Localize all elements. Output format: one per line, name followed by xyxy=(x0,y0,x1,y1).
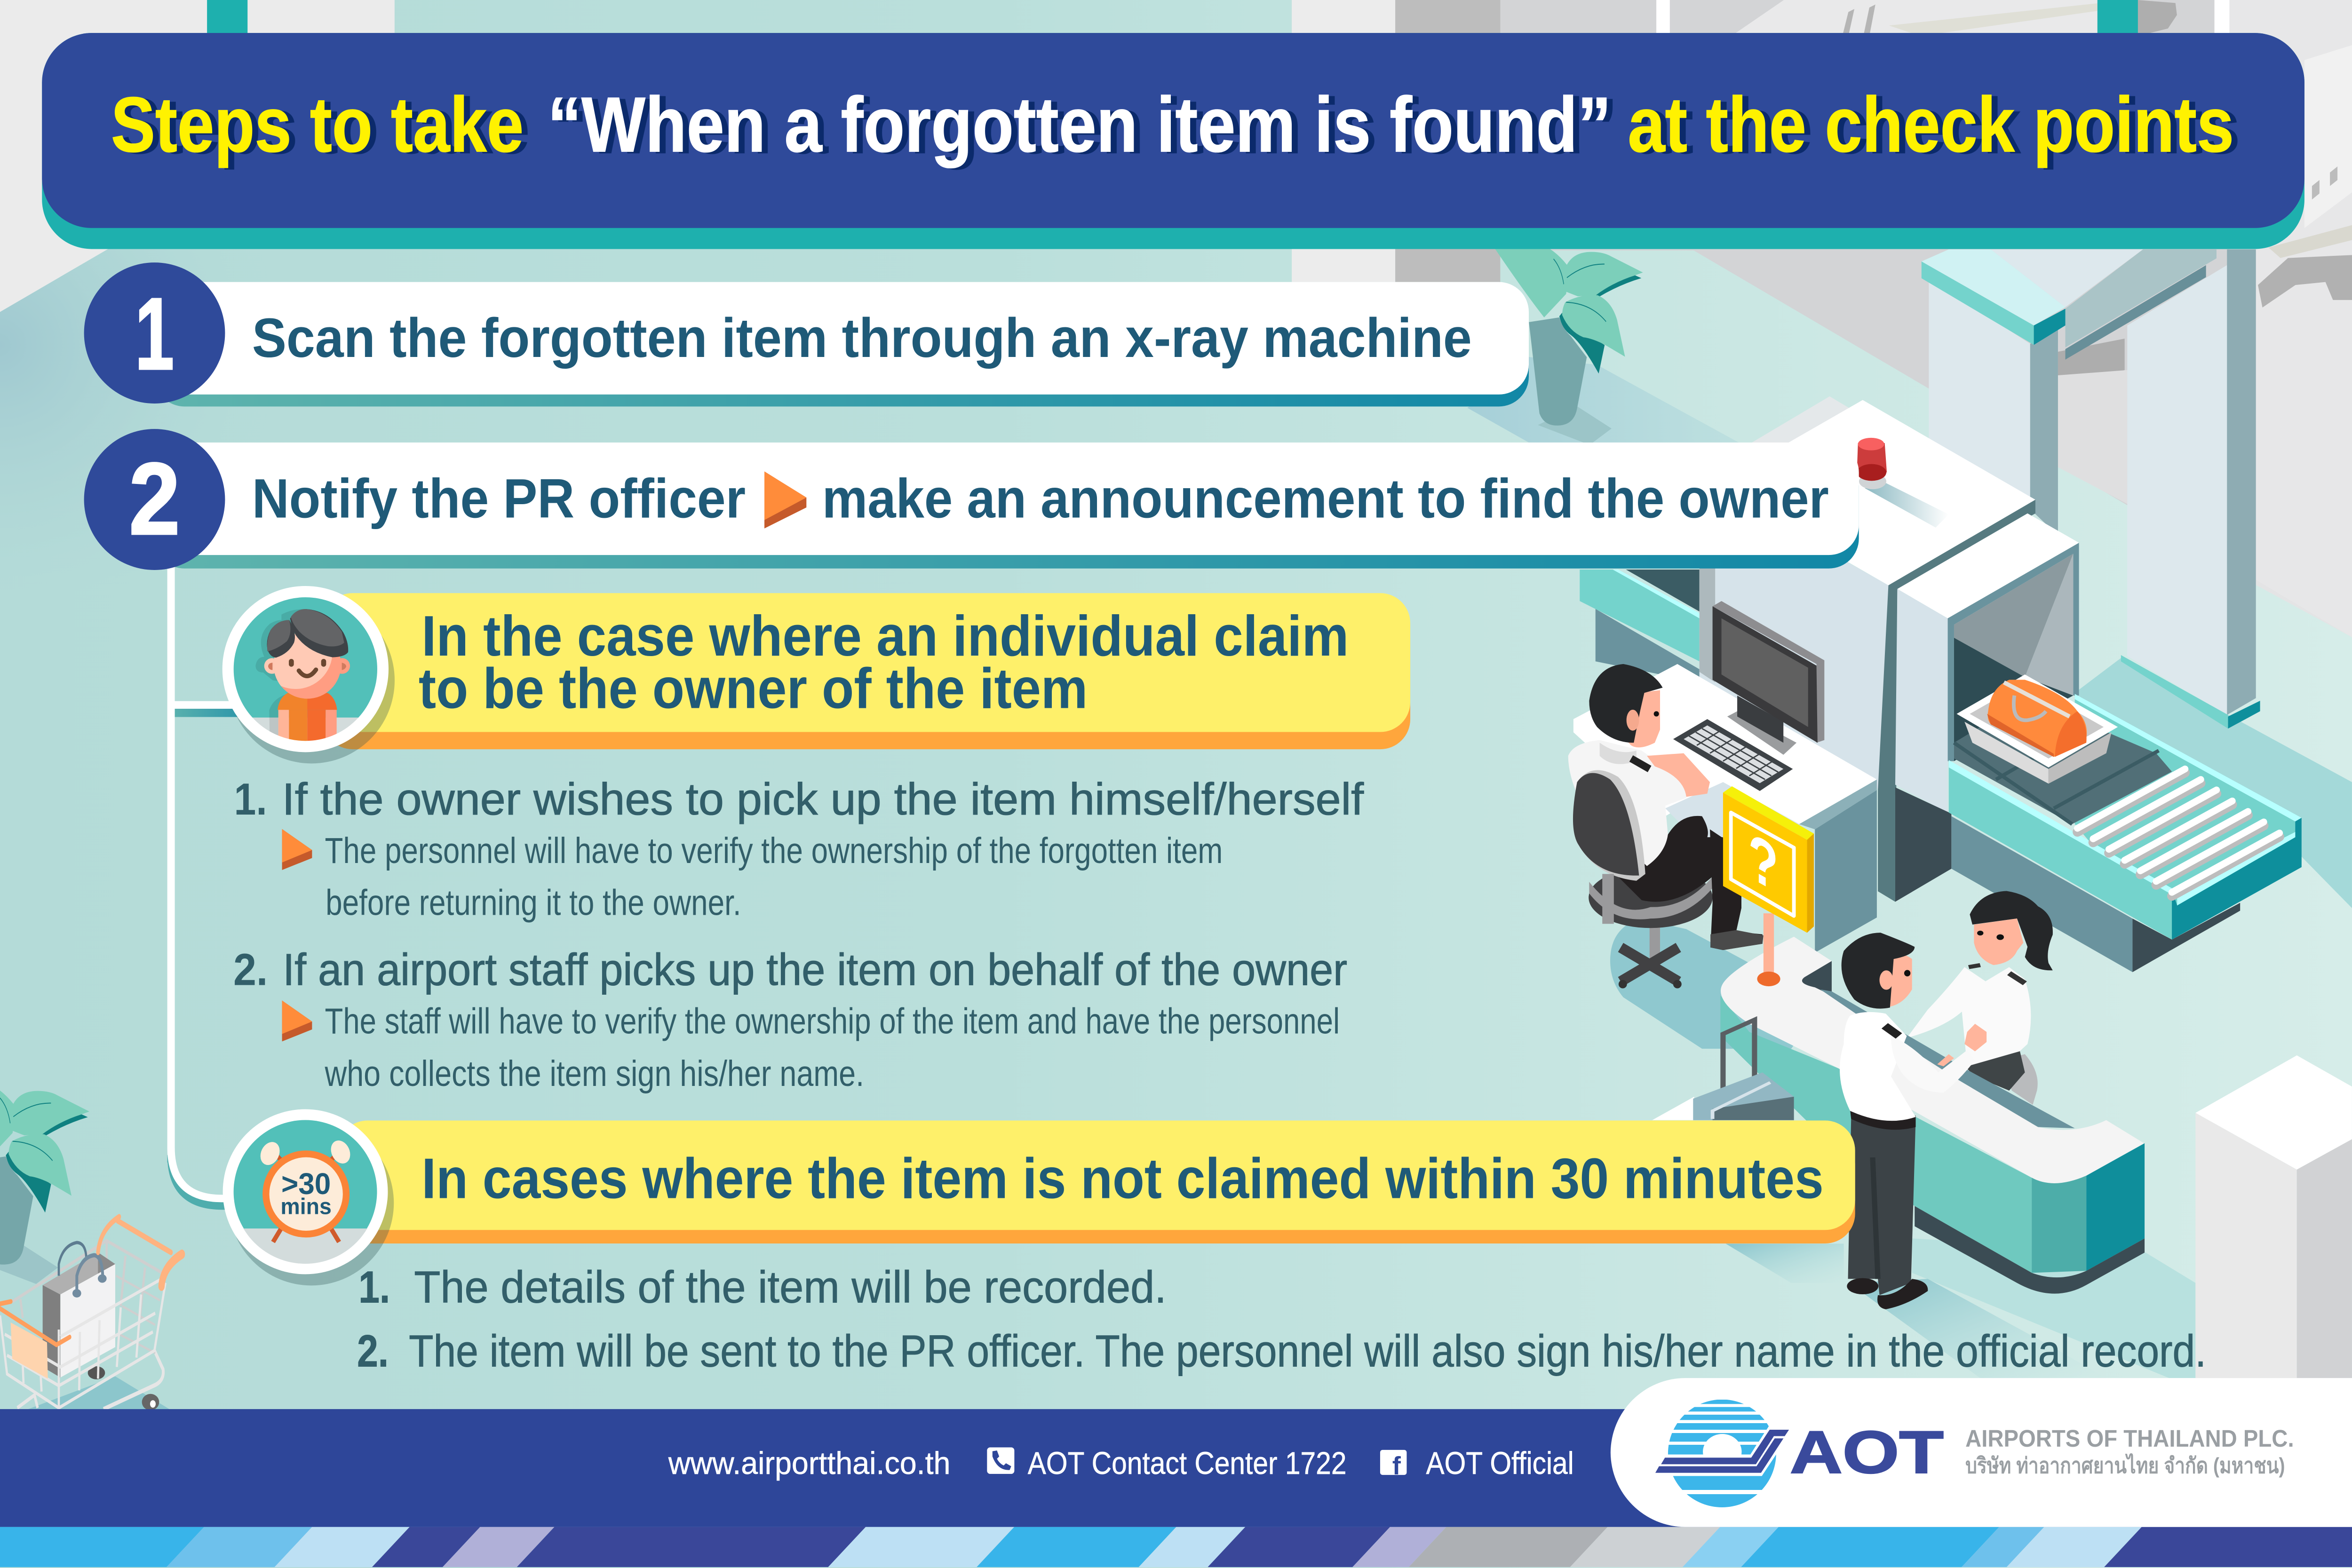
case 2 list xyxy=(357,1262,2206,1377)
icon: alarm clock: mins xyxy=(280,1195,332,1220)
orange bag in tray xyxy=(1957,674,2118,784)
case 2 heading: In cases where the item is not claimed within 30 minutes xyxy=(421,1146,1824,1210)
step 1 pill xyxy=(84,262,1529,406)
icon: person circle xyxy=(222,586,395,763)
icon: alarm clock: >30 xyxy=(281,1167,331,1201)
shopping cart xyxy=(0,1217,182,1410)
plant behind step 1 xyxy=(1491,238,1643,445)
case 1 list: before returning it to the owner. xyxy=(326,883,741,923)
case 1 list: The personnel will have to verify the ownership of the forgotten item xyxy=(325,831,1223,871)
AOT globe logo xyxy=(1655,1400,1789,1507)
step 2 number badge xyxy=(84,429,225,570)
title: Steps to take xyxy=(111,81,524,168)
conveyor belt xyxy=(1949,694,2302,972)
front desk counter xyxy=(1720,937,2145,1294)
icon: orange arrow xyxy=(764,471,806,529)
case 2 list: 1. xyxy=(358,1262,390,1313)
front counter scene xyxy=(1652,891,2195,1378)
monitor xyxy=(1713,601,1824,755)
company name xyxy=(1965,1425,2294,1478)
question-mark sign: ? xyxy=(1748,817,1778,908)
footer band xyxy=(0,1409,2352,1527)
footer stripes xyxy=(0,1527,2352,1567)
icon: facebook xyxy=(1380,1450,1406,1480)
case 1 list: If an airport staff picks up the item on behalf of the owner xyxy=(283,944,1347,995)
case 2 list: The details of the item will be recorded. xyxy=(414,1262,1167,1313)
step 2 text part two: make an announcement to find the owner xyxy=(822,467,1829,530)
step 2 text part one: Notify the PR officer xyxy=(252,467,746,530)
title: “When a forgotten item is found” xyxy=(548,81,1611,168)
case 1 list: 2. xyxy=(233,944,268,995)
step 2 number badge: 2 xyxy=(129,442,180,555)
floor bands xyxy=(1912,1238,2195,1378)
footer contact text: www.airportthai.co.th xyxy=(668,1446,950,1481)
icon: facebook: f xyxy=(1392,1452,1401,1480)
icon: alarm clock xyxy=(223,1109,394,1285)
step 1 number badge: 1 xyxy=(135,277,174,391)
red beacon xyxy=(1857,438,1887,489)
company name: AIRPORTS OF THAILAND PLC. xyxy=(1965,1425,2294,1452)
header banner xyxy=(42,33,2304,249)
walk-through arch xyxy=(1922,249,2260,729)
scanner back conveyor xyxy=(1580,570,1700,682)
footer contact text xyxy=(668,1446,1574,1481)
connector lines xyxy=(171,562,247,1206)
logo panel xyxy=(1611,1378,2352,1527)
step 1 number badge xyxy=(84,262,225,404)
icon: arrow bullet 2 xyxy=(282,1000,312,1041)
white block bottom right xyxy=(2195,1055,2352,1378)
case 2 yellow banner xyxy=(338,1120,1855,1243)
airport staff at counter xyxy=(1840,933,1986,1309)
case 1 heading: to be the owner of the item xyxy=(419,656,1088,720)
case 2 list: 2. xyxy=(357,1326,389,1377)
footer contact text: AOT Official xyxy=(1426,1446,1574,1481)
icon: arrow bullet xyxy=(282,829,312,870)
case 1 list: If the owner wishes to pick up the item himself/herself xyxy=(282,774,1364,824)
case 1 list xyxy=(233,774,1364,1094)
title: at the check points xyxy=(1628,81,2234,168)
case 1 yellow banner xyxy=(323,593,1410,749)
case 1 list: who collects the item sign his/her name. xyxy=(325,1054,864,1094)
case 1 list: 1. xyxy=(234,774,267,824)
case 1 heading xyxy=(419,604,1349,720)
keyboard xyxy=(1673,719,1793,791)
AOT wordmark: AOT xyxy=(1790,1419,1944,1486)
seated officer xyxy=(1568,664,1823,1049)
icon: phone xyxy=(987,1448,1014,1474)
title xyxy=(111,81,2234,168)
company name: บริษัท ท่าอากาศยานไทย จำกัด (มหาชน) xyxy=(1965,1453,2285,1478)
case 1 list: The staff will have to verify the ownership of the item and have the personnel xyxy=(325,1001,1340,1041)
step 2 pill xyxy=(84,429,1859,570)
scanner body xyxy=(1700,396,2079,902)
desk xyxy=(1573,664,1877,953)
suitcase xyxy=(1652,1020,1794,1120)
plant bottom left xyxy=(0,1077,89,1284)
x-ray scanner scene xyxy=(1568,249,2302,1049)
case 1 heading: In the case where an individual claim xyxy=(421,604,1349,668)
receptionist xyxy=(1907,891,2053,1105)
footer contact text: AOT Contact Center 1722 xyxy=(1028,1446,1346,1481)
floor shadow of plant and scanner xyxy=(1467,357,2352,908)
background walls and plane xyxy=(0,0,2352,645)
step 1 text: Scan the forgotten item through an x-ray machine xyxy=(252,307,1472,369)
question-mark sign xyxy=(1723,786,1814,986)
